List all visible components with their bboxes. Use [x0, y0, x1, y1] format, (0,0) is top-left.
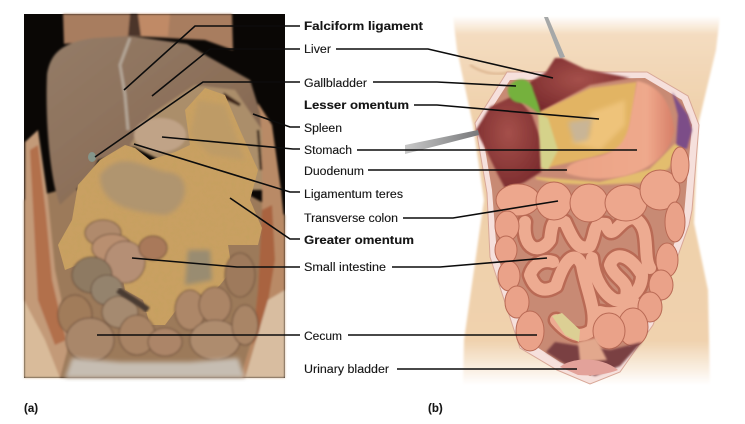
peritoneal rim	[475, 72, 699, 384]
labels: Lesser omentum	[304, 100, 409, 112]
left abdominal wall	[24, 130, 70, 378]
labels: Urinary bladder	[304, 364, 389, 376]
falciform ligament	[120, 38, 130, 130]
forceps left	[405, 130, 479, 154]
panel: cadaver photograph (a)	[24, 14, 285, 378]
panel: illustration (b)	[405, 16, 720, 385]
leader lines	[95, 26, 637, 369]
labels: Small intestine	[304, 262, 386, 274]
labels: Ligamentum teres	[304, 189, 403, 201]
labels: (a)	[24, 403, 38, 415]
liver left lobe	[528, 58, 630, 112]
ascending colon and cecum	[495, 211, 544, 351]
lesser omentum	[540, 82, 637, 168]
liver	[47, 36, 262, 205]
dark fold	[118, 290, 148, 310]
pelvic floor	[65, 358, 245, 378]
right abdominal wall	[240, 103, 285, 378]
mesentery	[552, 313, 580, 342]
torso skin	[453, 16, 720, 385]
labels: Greater omentum	[304, 235, 414, 247]
labels	[24, 21, 443, 415]
rectum	[578, 338, 607, 362]
forceps top	[544, 17, 565, 58]
labels: Gallbladder	[304, 78, 367, 90]
labels: Liver	[304, 44, 331, 56]
lower abdomen backdrop	[24, 190, 285, 378]
top chest tissue	[63, 14, 233, 50]
gallbladder	[508, 79, 540, 114]
descending colon	[593, 202, 685, 349]
upper skin fold	[470, 65, 510, 74]
spleen dark edge	[225, 95, 240, 105]
labels: (b)	[428, 403, 443, 415]
labels: Cecum	[304, 331, 342, 343]
gallbladder photo	[88, 152, 96, 162]
small intestine	[525, 218, 650, 335]
pelvic cavity	[546, 342, 642, 376]
labels: Transverse colon	[304, 213, 398, 225]
labels: Stomach	[304, 145, 352, 157]
greater omentum photo fat	[58, 88, 262, 325]
stomach	[130, 85, 262, 190]
labels: Falciform ligament	[304, 21, 423, 33]
abdominal cavity	[481, 78, 692, 376]
transverse colon	[496, 147, 689, 222]
liver right lobe	[476, 95, 541, 190]
small intestine photo loops	[58, 220, 258, 362]
spleen	[672, 92, 692, 149]
labels: Duodenum	[304, 166, 364, 178]
labels: Spleen	[304, 123, 342, 135]
urinary bladder	[560, 360, 618, 375]
greater omentum strip	[536, 145, 680, 184]
stomach	[566, 81, 674, 179]
omentum inner stomach show-through	[100, 161, 185, 215]
